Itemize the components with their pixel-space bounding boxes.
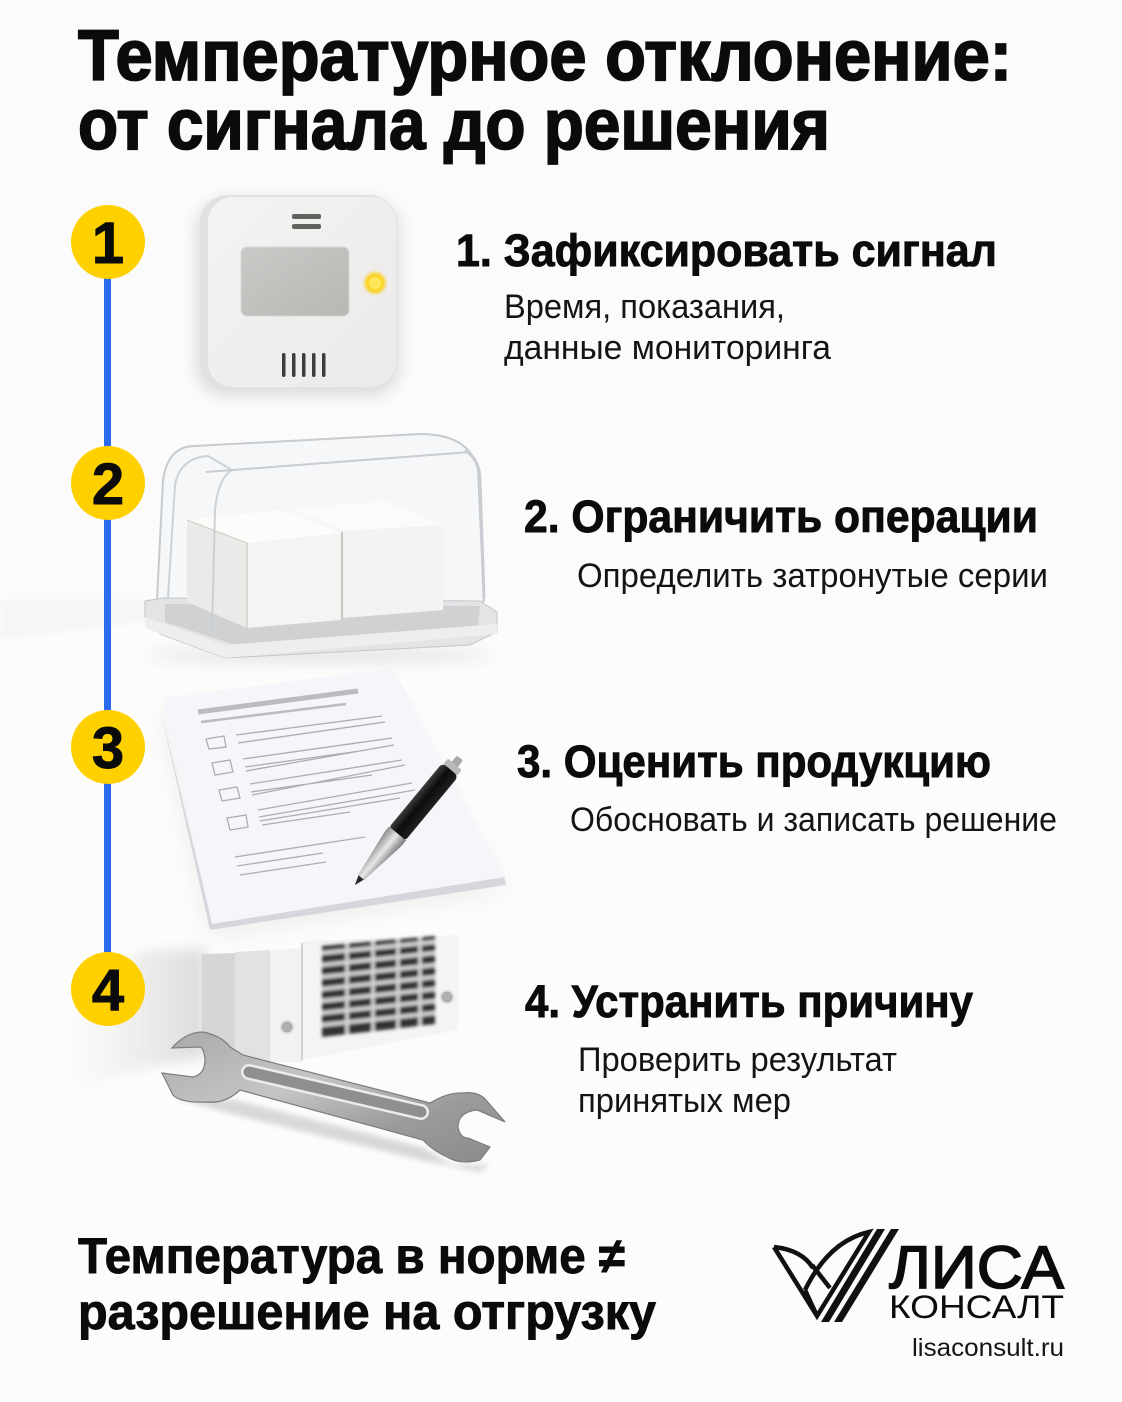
- pen: [346, 751, 468, 892]
- boxes: [187, 501, 443, 628]
- step 3 text: [517, 736, 1057, 839]
- wall shadow behind heater: [40, 948, 205, 1098]
- title: Температурное отклонение:: [78, 17, 1012, 96]
- step 1 text: [456, 225, 997, 367]
- footer note: [78, 1228, 656, 1340]
- timeline line: [104, 270, 111, 960]
- step 3 text: 3. Оценить продукцию: [517, 736, 991, 787]
- logo: ЛИСА: [889, 1234, 1064, 1301]
- step 1 text: Время, показания,: [504, 288, 785, 326]
- icon: temperature monitor: [196, 195, 400, 396]
- step marker 2: [71, 446, 145, 520]
- title: [78, 17, 1012, 165]
- step 4 text: Проверить результат: [578, 1041, 897, 1079]
- step 1 text: данные мониторинга: [504, 329, 831, 367]
- wrench: [162, 1032, 505, 1172]
- cooling unit: [202, 935, 458, 1062]
- step 4 text: [525, 976, 973, 1120]
- step 4 text: принятых мер: [578, 1082, 791, 1120]
- step 1 text: 1. Зафиксировать сигнал: [456, 225, 997, 276]
- icon: logo mark: [774, 1229, 899, 1322]
- footer note: разрешение на отгрузку: [78, 1284, 656, 1340]
- icon: checklist with pen: [160, 668, 506, 936]
- title: от сигнала до решения: [78, 86, 830, 165]
- icon: cooling unit and wrench: [162, 935, 505, 1172]
- logo: lisaconsult.ru: [912, 1334, 1064, 1362]
- step 2 text: [524, 491, 1048, 595]
- step 2 text: 2. Ограничить операции: [524, 491, 1038, 542]
- step marker 3: 3: [92, 716, 124, 781]
- step 2 text: Определить затронутые серии: [577, 557, 1048, 595]
- step marker 1: 1: [92, 211, 124, 276]
- icon: transparent container with boxes: [145, 434, 497, 662]
- step 4 text: 4. Устранить причину: [525, 976, 973, 1027]
- logo: КОНСАЛТ: [889, 1289, 1064, 1325]
- step marker 4: [71, 952, 145, 1026]
- step marker 1: [71, 205, 145, 279]
- step marker 3: [71, 710, 145, 784]
- logo: [774, 1229, 1064, 1362]
- footer note: Температура в норме ≠: [78, 1228, 625, 1284]
- step marker 2: 2: [92, 452, 124, 517]
- step 3 text: Обосновать и записать решение: [570, 801, 1057, 839]
- step marker 4: 4: [92, 958, 124, 1023]
